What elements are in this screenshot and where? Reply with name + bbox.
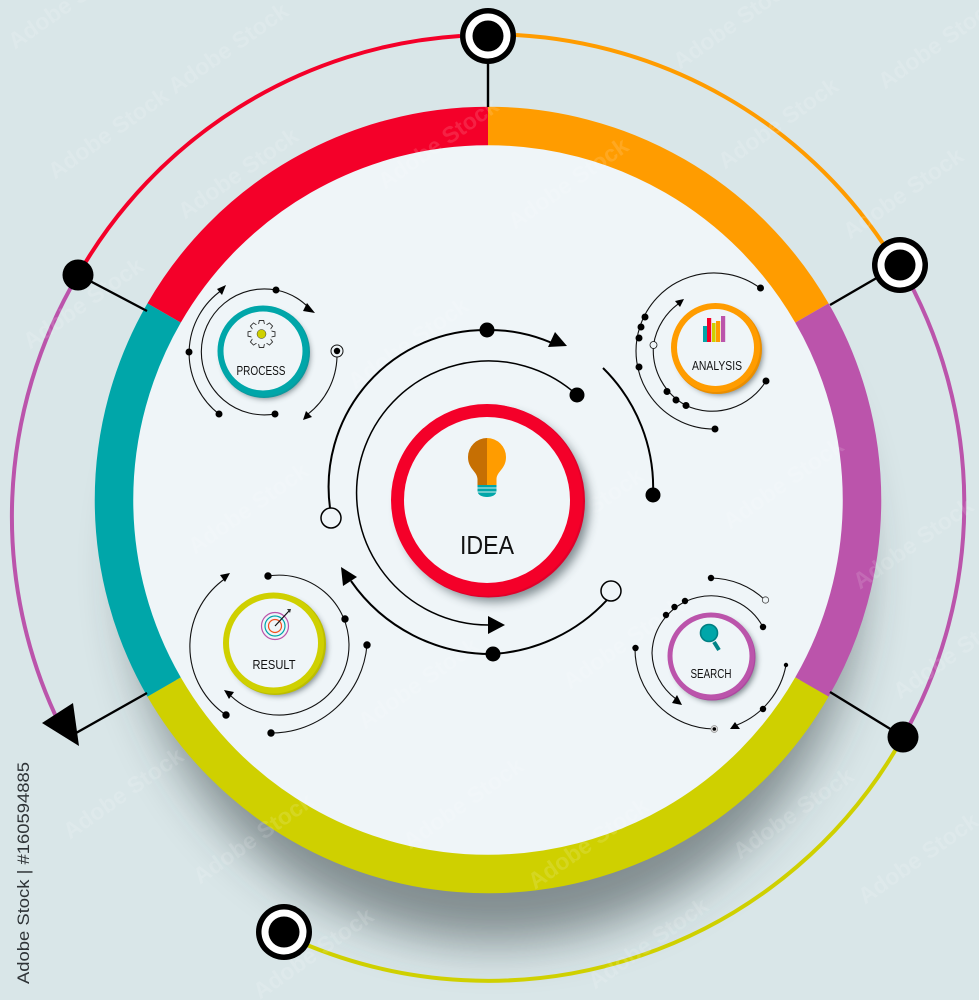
icon: bar chart bbox=[703, 316, 725, 342]
idea badge bbox=[398, 410, 589, 602]
arrow: lower left bbox=[42, 703, 79, 746]
label: RESULT: RESULT bbox=[252, 658, 296, 672]
label: PROCESS: PROCESS bbox=[236, 364, 286, 378]
segment: teal bbox=[114, 313, 164, 687]
watermark pattern: Adobe Stock bbox=[173, 122, 303, 224]
watermark pattern: Adobe Stock bbox=[58, 742, 188, 844]
watermark pattern: Adobe Stock bbox=[43, 82, 173, 184]
watermark pattern: Adobe Stock bbox=[848, 492, 978, 594]
node: left bbox=[62, 260, 94, 290]
watermark pattern: Adobe Stock bbox=[398, 402, 528, 504]
icon: magnifier bbox=[700, 624, 719, 650]
watermark pattern: Adobe Stock bbox=[343, 292, 473, 394]
watermark pattern: Adobe Stock bbox=[838, 142, 968, 244]
central arcs bbox=[329, 330, 653, 654]
panel: search bbox=[632, 575, 788, 732]
icon: gear bbox=[248, 320, 275, 348]
watermark pattern: Adobe Stock bbox=[713, 72, 843, 174]
watermark pattern: Adobe Stock bbox=[718, 432, 848, 534]
central arc markers bbox=[321, 322, 660, 662]
main disc face bbox=[128, 140, 848, 860]
label: IDEA: IDEA bbox=[460, 530, 515, 560]
panel: analysis bbox=[636, 273, 770, 432]
segment: red bbox=[164, 126, 488, 313]
main disc shadow bbox=[130, 198, 860, 942]
watermark pattern: Adobe Stock bbox=[163, 0, 293, 99]
panel: process bbox=[186, 285, 343, 420]
watermark pattern: Adobe Stock bbox=[398, 752, 528, 854]
watermark pattern: Adobe Stock bbox=[353, 632, 483, 734]
node: top bbox=[460, 8, 516, 64]
watermark pattern: Adobe Stock bbox=[523, 792, 653, 894]
label: ANALYSIS: ANALYSIS bbox=[692, 359, 742, 373]
watermark pattern: Adobe Stock bbox=[558, 592, 688, 694]
watermark pattern: Adobe Stock bbox=[583, 892, 713, 994]
icon: target bbox=[262, 609, 291, 640]
icon: light bulb bbox=[468, 438, 506, 497]
watermark pattern: Adobe Stock bbox=[518, 462, 648, 564]
node: right bbox=[872, 237, 928, 293]
panel: result bbox=[190, 572, 371, 737]
label: SEARCH: SEARCH bbox=[690, 667, 732, 681]
watermark pattern: Adobe Stock bbox=[373, 92, 503, 194]
watermark pattern: Adobe Stock bbox=[18, 252, 148, 354]
node: bottom bbox=[256, 904, 312, 960]
segment: orange bbox=[488, 126, 812, 313]
side credit: Adobe Stock | #160594885 bbox=[15, 762, 33, 984]
watermark pattern: Adobe Stock bbox=[728, 762, 858, 864]
watermark pattern: Adobe Stock bbox=[188, 787, 318, 889]
segment: purple bbox=[812, 313, 862, 687]
main coloured ring bbox=[114, 126, 862, 874]
connector lines bbox=[76, 60, 892, 733]
node: lower right bbox=[888, 722, 918, 752]
watermark pattern: Adobe Stock bbox=[183, 457, 313, 559]
watermark pattern: Adobe Stock bbox=[503, 132, 633, 234]
segment: yellow bbox=[164, 687, 812, 874]
